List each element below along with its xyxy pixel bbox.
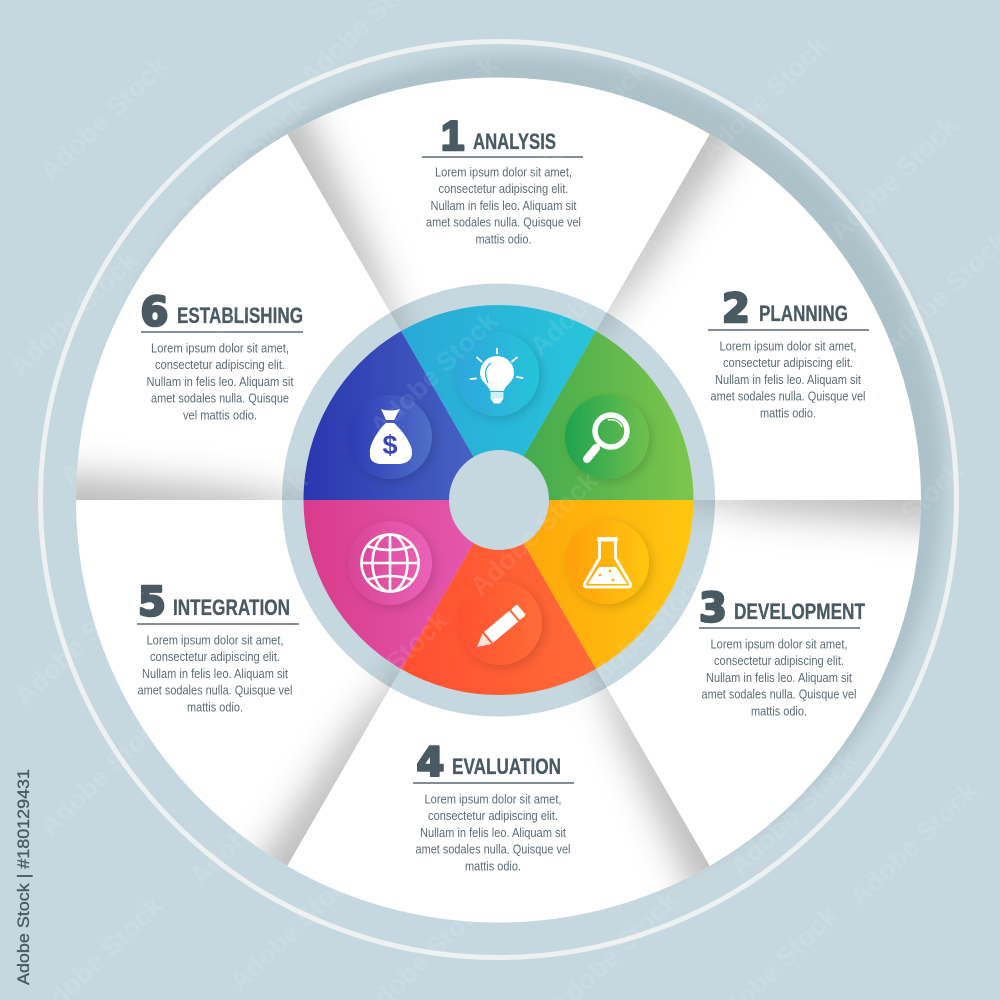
watermark: Adobe Stock — [34, 50, 174, 187]
body text: amet sodales nulla. Quisque — [151, 391, 289, 406]
step 2: planning — [708, 286, 869, 420]
body text: vel mattis odio. — [183, 407, 257, 422]
heading: ANALYSIS — [473, 129, 556, 154]
step 3: development — [699, 586, 865, 718]
watermark: Adobe Stock — [504, 765, 644, 902]
watermark: Adobe Stock — [204, 210, 344, 347]
icon: flask — [565, 520, 649, 604]
icon: pencil — [458, 581, 542, 665]
body text: consectetur adipiscing elit. — [438, 181, 568, 196]
heading: EVALUATION — [452, 754, 561, 779]
body text: Nullam in felis leo. Aliquam sit — [706, 670, 852, 685]
watermark: Adobe Stock — [34, 705, 174, 842]
body text: mattis odio. — [465, 858, 521, 873]
wedge: planning green — [498, 331, 694, 500]
body text: mattis odio. — [187, 699, 243, 714]
step 1: analysis — [422, 112, 583, 246]
number 4: 4 — [416, 740, 444, 786]
white main disk — [76, 78, 921, 922]
body text: amet sodales nulla. Quisque vel — [710, 389, 866, 404]
wedge: evaluation red — [401, 500, 596, 695]
body text: Lorem ipsum dolor sit amet, — [424, 792, 562, 806]
stock id side text: Adobe Stock | #180129431 — [14, 769, 33, 985]
watermark: Adobe Stock — [224, 860, 364, 997]
body text: Nullam in felis leo. Aliquam sit — [715, 372, 861, 387]
fold shadows on the six white segments — [76, 114, 921, 886]
wedge: development yellow — [498, 500, 694, 669]
icon: money bag: $ — [382, 430, 398, 460]
watermark: Adobe Stock — [4, 245, 144, 382]
body text: Nullam in felis leo. Aliquam sit — [146, 374, 294, 389]
watermark: Adobe Stock — [314, 605, 454, 742]
watermark: Adobe Stock — [364, 305, 504, 442]
body text: mattis odio. — [760, 405, 816, 420]
watermark: Adobe Stock — [364, 50, 504, 187]
body text — [416, 792, 570, 873]
body text — [710, 338, 866, 420]
body text: Lorem ipsum dolor sit amet, — [435, 164, 572, 180]
body text — [426, 164, 581, 246]
body text: Lorem ipsum dolor sit amet, — [146, 632, 284, 648]
body text: amet sodales nulla. Quisque vel — [416, 842, 570, 857]
centre hole — [449, 450, 549, 550]
wedge: establishing blue — [304, 331, 498, 500]
step 6: establishing — [140, 290, 303, 422]
body text — [138, 632, 292, 714]
icon: light bulb — [455, 332, 539, 416]
number 6: 6 — [140, 290, 168, 336]
heading: ESTABLISHING — [177, 303, 303, 328]
heading: INTEGRATION — [173, 595, 290, 620]
body text: Nullam in felis leo. Aliquam sit — [142, 666, 288, 681]
watermark: Adobe Stock — [574, 565, 714, 702]
number 5: 5 — [138, 580, 166, 626]
body text: Nullam in felis leo. Aliquam sit — [420, 825, 566, 840]
wedge: analysis cyan — [401, 305, 596, 500]
watermark: Adobe Stock — [174, 90, 314, 227]
number 2: 2 — [722, 286, 750, 332]
watermark: Adobe Stock — [824, 110, 964, 247]
body text: Nullam in felis leo. Aliquam sit — [430, 198, 577, 213]
body text — [146, 340, 294, 422]
watermark: Adobe Stock — [184, 755, 324, 892]
number 3: 3 — [699, 586, 727, 632]
watermark: Adobe Stock — [174, 465, 314, 602]
step 5: integration — [137, 580, 299, 714]
watermark: Adobe Stock — [9, 575, 149, 712]
watermark: Adobe Stock — [704, 395, 844, 532]
body text: consectetur adipiscing elit. — [723, 355, 853, 370]
inner pale ring — [282, 284, 715, 716]
body text — [702, 636, 856, 718]
heading: DEVELOPMENT — [734, 599, 865, 624]
watermark: Adobe Stock — [464, 465, 604, 602]
watermark: Adobe Stock — [54, 355, 194, 492]
body text: consectetur adipiscing elit. — [155, 357, 285, 372]
body text: amet sodales nulla. Quisque vel — [138, 683, 292, 698]
watermark: Adobe Stock — [844, 775, 984, 912]
body text: Lorem ipsum dolor sit amet, — [151, 340, 289, 356]
watermark: Adobe Stock — [724, 745, 864, 882]
watermark: Adobe Stock — [829, 455, 969, 592]
body text: consectetur adipiscing elit. — [428, 808, 558, 823]
number 1: 1 — [441, 112, 464, 159]
watermark: Adobe Stock — [514, 55, 654, 192]
body text: consectetur adipiscing elit. — [714, 653, 844, 668]
heading: PLANNING — [759, 301, 848, 326]
body text: amet sodales nulla. Quisque vel — [426, 215, 581, 230]
watermark: Adobe Stock — [694, 30, 834, 167]
icon: magnifier — [565, 395, 649, 479]
body text: Lorem ipsum dolor sit amet, — [720, 338, 856, 354]
wedge: integration magenta — [304, 500, 498, 669]
step 4: evaluation — [413, 740, 574, 873]
body text: consectetur adipiscing elit. — [150, 649, 280, 664]
body text: mattis odio. — [476, 231, 532, 246]
body text: Lorem ipsum dolor sit amet, — [710, 636, 848, 652]
colour wheel — [304, 305, 694, 695]
icon: globe — [348, 521, 432, 605]
disk drop shadow on the outer band — [96, 55, 944, 903]
body text: mattis odio. — [751, 703, 807, 718]
watermark: Adobe Stock — [524, 225, 664, 362]
icon: money bag — [348, 395, 432, 479]
body text: amet sodales nulla. Quisque vel — [702, 687, 856, 702]
